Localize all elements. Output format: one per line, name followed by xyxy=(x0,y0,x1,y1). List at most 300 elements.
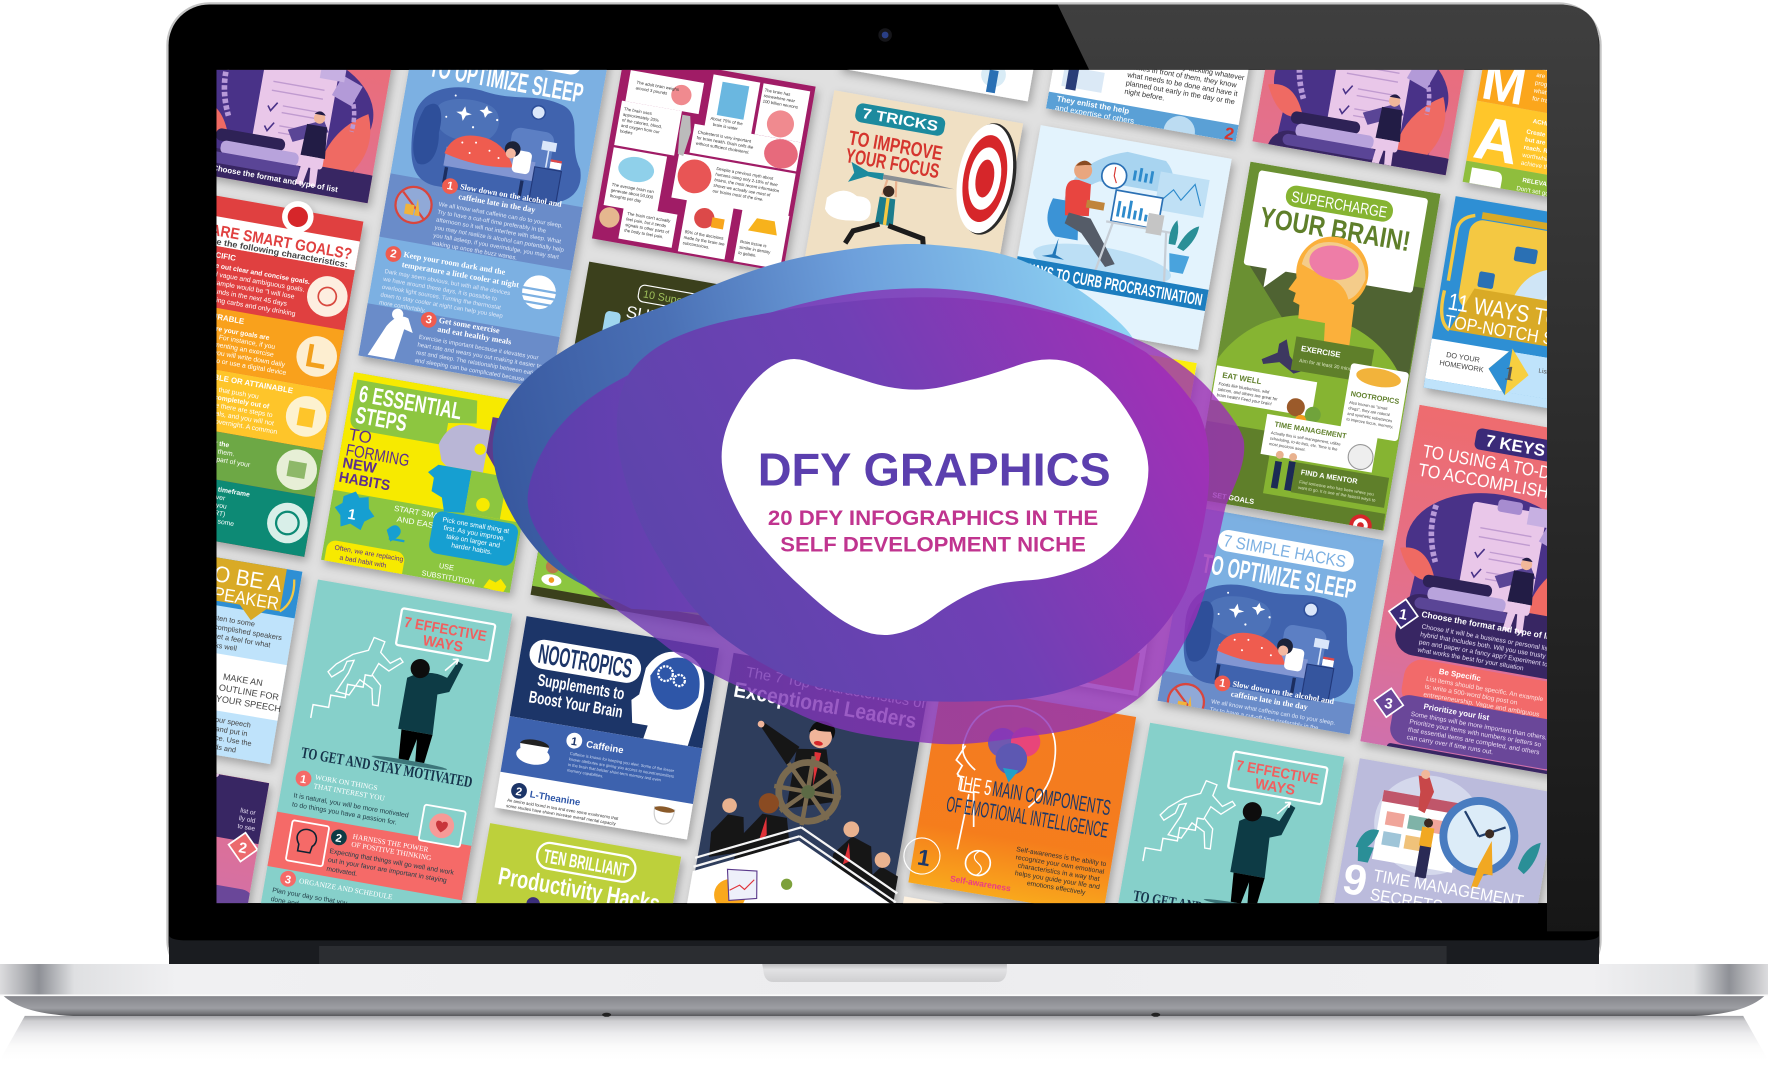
poster: improve your focus: 1 xyxy=(814,261,824,276)
badge: blue back layer xyxy=(493,244,1173,631)
poster: speaker left: SPEAKER xyxy=(201,581,280,614)
poster: list format lower-left: to see xyxy=(237,823,256,833)
exercise box xyxy=(1291,336,1374,383)
poster: ten brilliant productivity hacks: Productivity Hacks xyxy=(496,863,662,918)
poster: optimize sleep top: Dark may seem obvious, but with all the devices xyxy=(384,269,511,297)
poster: list format lower-left: list or xyxy=(240,807,257,817)
poster: supercharge your brain: YOUR BRAIN! xyxy=(1257,200,1413,257)
poster: smart goals: An example would be "I will lose xyxy=(199,277,295,301)
poster: list format lower-left xyxy=(216,773,275,904)
poster: eleven ways speaker: TOP-NOTCH SPEAKER xyxy=(1443,311,1619,360)
poster: hidden under badge xyxy=(1076,354,1202,704)
poster: six essential steps: SUBSTITUTION xyxy=(421,568,475,586)
poster: superfoods: 10 Superfoods xyxy=(642,288,713,312)
poster: seven keys to do list: Some things will be more important than others. xyxy=(1410,711,1547,742)
poster: improve your focus xyxy=(804,90,1029,256)
poster: MAD acronym: Don't set goals xyxy=(1516,185,1557,199)
poster: optimize sleep top: temperature a little cooler at night xyxy=(401,260,520,290)
subtitle xyxy=(768,505,1098,557)
poster: optimize sleep top: 2 xyxy=(389,248,397,261)
poster: MAD acronym: A xyxy=(1469,103,1524,177)
poster: optimize sleep right: caffeine late in the day xyxy=(1230,689,1308,712)
poster: brain facts: approximately 20% xyxy=(623,112,659,123)
poster: superfoods: YOUR BRAIN xyxy=(630,323,737,360)
poster: optimize sleep top: We all know what caffeine can do to your sleep. xyxy=(438,202,564,230)
poster: seven keys to do list: Prioritize your items with numbers or letters so xyxy=(1409,719,1542,749)
poster: supercharge your brain: to improve focus, memory, xyxy=(1346,416,1394,429)
poster: MAD acronym: M xyxy=(1478,51,1530,116)
poster: brain facts: signals to other parts of xyxy=(625,222,670,235)
poster: improve your focus: 7 TRICKS xyxy=(861,106,939,135)
poster: brain facts: without sufficient cholesterol. xyxy=(695,141,750,155)
screen glare on bezel xyxy=(1058,5,1599,940)
poster: list format top-left: Choose the format and type of list xyxy=(212,163,339,194)
poster: seven keys to do list: hybrid that includes both. Will you use trusty old xyxy=(1420,631,1557,662)
poster: brain facts: Cholesterol is very important xyxy=(697,129,752,144)
poster: MAD acronym: Create go xyxy=(1526,128,1555,140)
poster: brain facts: of the calories, blood, xyxy=(622,117,662,129)
poster: smart goals: Make sure it is part of your xyxy=(171,448,251,469)
poster: eleven ways speaker xyxy=(1422,196,1547,417)
poster: six essential steps: take on larger and xyxy=(446,533,501,550)
laptop lid xyxy=(166,2,1602,983)
poster: optimize sleep right: Try to have a cut-off time preferably in the xyxy=(1209,707,1319,732)
poster: speaker left: friends and xyxy=(200,740,237,755)
poster: speaker left: accomplished speakers xyxy=(206,621,283,642)
poster: smart goals xyxy=(216,195,369,565)
poster: optimize sleep top: 7 SIMPLE HACKS xyxy=(456,36,569,70)
poster: smart goals: ARE SMART GOALS? xyxy=(209,222,353,263)
poster: exceptional leaders: Exceptional Leaders xyxy=(732,677,918,733)
poster: optimize sleep top: and eat healthy meals xyxy=(437,325,512,347)
poster: optimize sleep top: and sleeping can be complicated because xyxy=(414,358,525,383)
poster: eleven ways speaker: Listen to some xyxy=(1538,367,1579,381)
poster: smart goals: have the following characteristics: xyxy=(200,234,349,269)
poster: optimize sleep right: TO OPTIMIZE SLEEP xyxy=(1200,548,1358,605)
poster: smart goals: Write out clear and concise goals. xyxy=(202,260,311,286)
poster: effective ways left: 7 EFFECTIVE xyxy=(403,615,488,645)
poster: supercharge your brain: Actually this is self-management, utilize xyxy=(1271,430,1342,447)
poster: blindly tackling: Instead of blindly tackling whatever xyxy=(1132,54,1246,82)
brain fact cards xyxy=(598,60,811,269)
poster: brain facts: made by the brain are xyxy=(683,235,726,247)
poster: smart goals: have a time to add some xyxy=(160,508,235,528)
poster: optimize sleep top: overlook light sources. Turning the thermostat xyxy=(381,285,502,312)
badge: white blob xyxy=(722,359,1148,635)
poster: time management secrets: 9 xyxy=(1339,855,1371,906)
webcam xyxy=(878,28,892,42)
poster: brain facts: to gelatin. xyxy=(738,250,757,258)
poster: MAD acronym: for track. xyxy=(1532,95,1557,106)
poster: nootropics: known attributes are giving you access to neurotransmitters xyxy=(569,756,675,779)
poster: six essential steps: Often, we are replacing xyxy=(334,545,404,564)
poster: emotional intelligence: emotions effectively xyxy=(1026,880,1086,897)
poster: curb procrastination xyxy=(1006,125,1232,353)
poster: seven keys to do list xyxy=(1359,404,1547,783)
poster: effective ways left: 3 xyxy=(284,874,292,887)
poster: effective ways left: HARNESS THE POWER xyxy=(352,832,429,854)
poster: supercharge your brain: FIND A MENTOR xyxy=(1300,467,1359,486)
poster: brain facts: around 3 pounds xyxy=(635,85,668,96)
poster: MAD acronym: are impl. xyxy=(1536,72,1561,83)
poster: eleven ways speaker: 11 WAYS TO BE A xyxy=(1446,289,1612,342)
reflection xyxy=(0,1016,1768,1060)
poster: brain facts: The brain uses xyxy=(624,106,652,116)
poster: optimize sleep top: Exercise is important because it elevates your xyxy=(418,335,539,362)
poster: six essential steps: harder habits. xyxy=(451,542,493,556)
poster: MAD acronym xyxy=(1462,70,1547,206)
poster: emotional intelligence: helps you guide your life and xyxy=(1014,870,1100,891)
poster: smart goals: reach. Realize there are steps to xyxy=(176,395,273,419)
poster: blindly tackling: and expertise of others xyxy=(1054,103,1135,126)
poster: seven keys to do list: TO USING A TO-DO LIST xyxy=(1421,441,1600,492)
poster: smart goals: 10 pounds in the next 45 days xyxy=(198,285,288,308)
poster: smart goals: sake of having them. xyxy=(172,441,235,458)
poster: nootropics: some studies have shown increase overall mental capacity xyxy=(506,803,617,826)
poster: optimize sleep top: down to stay cooler at night can help you sleep xyxy=(380,292,504,320)
poster: emotional intelligence: OF EMOTIONAL INTELLIGENCE xyxy=(945,792,1110,843)
poster: nootropics: memory capabilities. xyxy=(567,767,604,779)
poster: time management secrets: TIME MANAGEMENT xyxy=(1372,866,1525,911)
poster: seven keys to do list: Be Specific xyxy=(1438,667,1482,683)
poster: ten brilliant productivity hacks: TEN BRILLIANT xyxy=(542,846,630,882)
poster: six essential steps: TO xyxy=(347,425,373,448)
poster: speaker left: YOUR SPEECH xyxy=(215,693,282,714)
poster: emotional intelligence: Self-awareness is the ability to xyxy=(1016,846,1107,868)
poster: MAD acronym: RELEVANT xyxy=(1522,177,1556,190)
poster: brain facts: brains, the most recent information xyxy=(714,177,780,193)
find a mentor box xyxy=(1291,462,1389,508)
poster: supercharge your brain: most precious asset. xyxy=(1269,441,1306,452)
poster: nootropics: 1 xyxy=(570,736,578,749)
set goals box xyxy=(1205,484,1385,530)
poster: emotional intelligence: 1 xyxy=(916,845,932,871)
poster: supercharge your brain: salmon, and others are great for xyxy=(1217,387,1279,402)
poster: seven keys to do list: Prioritize your list xyxy=(1423,702,1490,722)
time management card xyxy=(1261,414,1378,473)
poster: speaker left: Listen to some xyxy=(207,612,256,629)
poster: optimize sleep top: you fall asleep, if you overindulge, you may start xyxy=(433,233,560,261)
poster: curb procrastination: WAYS TO CURB PROCRASTINATION xyxy=(1023,260,1204,310)
eat well card xyxy=(1211,365,1317,417)
head with brain xyxy=(1288,236,1368,346)
poster: supercharge your brain: SUPERCHARGE xyxy=(1290,189,1388,222)
poster: nootropics: Caffeine xyxy=(585,739,624,756)
poster: smart goals: chance you will ever xyxy=(165,485,226,503)
poster: blindly tackling xyxy=(1044,70,1256,150)
poster: brain facts: similar in density xyxy=(739,244,772,255)
poster: improve your focus: TO IMPROVE xyxy=(847,127,944,165)
poster: effective ways left: TO GET AND STAY MOTIVATED xyxy=(300,745,474,791)
step 3 diamond: 3 xyxy=(1383,696,1394,713)
poster: brain facts: About 75% of the xyxy=(710,116,744,126)
poster: optimize sleep top: rest and sleep. The relationship between eating xyxy=(415,350,540,378)
poster: effective ways left: 1 xyxy=(299,774,307,786)
poster: smart goals: MEASURABLE xyxy=(189,308,245,326)
poster: supercharge your brain: EXERCISE xyxy=(1300,344,1341,359)
poster: ten brilliant productivity hacks xyxy=(474,823,687,904)
poster: effective ways left: OF POSITIVE THINKING xyxy=(351,840,433,863)
poster: six essential steps: a bad habit with xyxy=(339,555,387,570)
ship deck xyxy=(687,840,890,904)
poster: optimize sleep right: Slow down on the alcohol and xyxy=(1232,679,1335,706)
poster: seven keys to do list: TO ACCOMPLISH MORE xyxy=(1417,460,1602,511)
poster: smart goals: program, you will write down daily xyxy=(185,344,286,369)
poster: smart goals: Create goals that push you xyxy=(179,380,259,401)
poster: exceptional leaders xyxy=(686,653,928,904)
poster: effective ways right: WAYS xyxy=(1254,776,1296,799)
poster: brain facts: feel pain, but it sends xyxy=(626,216,666,228)
poster: nootropics: Supplements to xyxy=(536,670,626,704)
poster: nootropics: Boost Your Brain xyxy=(528,687,624,722)
poster: brain facts: and oxygen from our xyxy=(621,123,661,135)
poster: MAD acronym: achieve the xyxy=(1520,160,1553,172)
poster: supercharge your brain: EAT WELL xyxy=(1222,371,1262,386)
poster: nootropics: An amino acid found in tea and even some mushrooms that xyxy=(507,797,620,821)
poster: MAD acronym: ACHIEV. xyxy=(1532,118,1558,129)
base top surface xyxy=(0,964,1768,996)
poster: MAD acronym: but are no xyxy=(1524,136,1555,148)
poster: speaker left: works well xyxy=(202,638,238,653)
poster: seven keys to do list: that essential items are completed, and others xyxy=(1407,726,1541,757)
poster: effective ways left: WAYS xyxy=(421,633,464,656)
laptop base xyxy=(0,964,1768,1060)
poster: six essential steps: START SMALL xyxy=(393,504,449,522)
poster: supercharge your brain: TIME MANAGEMENT xyxy=(1274,420,1348,441)
poster: six essential steps: HABITS xyxy=(337,470,392,494)
poster: brain facts: the body to feel pain. xyxy=(624,228,664,239)
poster: MAD acronym: reach. Re xyxy=(1523,144,1552,156)
title: DFY GRAPHICS xyxy=(758,444,1111,496)
poster: brain facts: somewhere near xyxy=(763,93,796,104)
poster: smart goals: ACHIEVABLE OR ATTAINABLE xyxy=(178,366,294,395)
lid opening notch xyxy=(762,964,1007,982)
poster: MAD acronym: what you xyxy=(1532,87,1559,99)
poster: effective ways right: 7 EFFECTIVE xyxy=(1235,758,1320,788)
poster: optimize sleep top xyxy=(357,70,614,392)
poster: superfoods xyxy=(529,262,717,629)
poster: blindly tackling: 2 xyxy=(1223,124,1236,144)
subtitle: SELF DEVELOPMENT NICHE xyxy=(780,532,1086,557)
poster: supercharge your brain xyxy=(1205,162,1446,538)
poster: effective ways left: to do things you have a passion for. xyxy=(291,801,397,827)
central badge xyxy=(493,244,1244,744)
poster: optimize sleep top: heart rate and wears you out making it easier to xyxy=(417,342,543,370)
poster: emotional intelligence xyxy=(903,698,1142,904)
poster: brain facts: Brain tissue is xyxy=(740,239,767,248)
badge: main purple layer xyxy=(617,297,1209,702)
poster: blindly tackling: planned out early in the day or the xyxy=(1125,78,1236,106)
poster: speaker left: TO BE A xyxy=(200,559,284,597)
poster: speaker left: MAKE AN xyxy=(222,672,263,688)
poster: optimize sleep top: more comfortably. xyxy=(379,300,426,314)
poster: optimize sleep top: Try to have a cut-off time preferably in the xyxy=(437,210,547,235)
poster: improve your focus: PREPARE YOUR WORK xyxy=(832,265,922,289)
poster: effective ways left: out in your favor are important in staying xyxy=(327,857,447,885)
poster: supercharge your brain: Also known as "smart xyxy=(1349,400,1389,411)
poster: eleven ways speaker: DO YOUR xyxy=(1446,350,1481,364)
target xyxy=(956,123,1020,235)
sleep box xyxy=(1191,420,1273,501)
poster: list format top-left xyxy=(216,70,399,212)
poster: optimize sleep top: Keep your room dark and the xyxy=(403,250,506,277)
puzzle head xyxy=(428,417,504,519)
poster: optimize sleep right xyxy=(1156,509,1390,742)
poster: effective ways left: motivated. xyxy=(326,866,358,878)
poster: nootropics: L-Theanine xyxy=(529,789,581,809)
poster: brain facts: 100 billion neurons xyxy=(762,99,798,110)
base body xyxy=(0,964,1768,1016)
poster: effective ways right xyxy=(1089,723,1344,1070)
poster: effective ways left xyxy=(259,580,518,904)
poster: emotional intelligence: recognize your own emotional xyxy=(1015,854,1105,876)
poster: white top strip xyxy=(838,70,1041,110)
poster: smart goals: by cutting carbs and only drinking xyxy=(196,294,296,318)
poster: six essential steps: NEW xyxy=(341,455,378,477)
subtitle: 20 DFY INFOGRAPHICS IN THE xyxy=(768,505,1098,530)
poster: effective ways left: It is natural, you will be more motivated xyxy=(293,792,409,820)
poster: smart goals: add the S in SMART) xyxy=(162,501,226,519)
poster: seven keys to do list: List items should be specific. An example xyxy=(1426,676,1544,703)
poster: optimize sleep top: Slow down on the alcohol and xyxy=(459,182,563,209)
dart with hanging man xyxy=(843,162,954,245)
poster: seven keys to do list: entrepreneurship. Vague and ambiguous xyxy=(1423,691,1541,719)
poster: emotional intelligence: THE 5 xyxy=(954,771,994,800)
poster: exceptional leaders: The 7 Top Characteristics of xyxy=(745,665,928,712)
poster: nootropics xyxy=(495,616,719,840)
poster: speaker left: to get a feel for what xyxy=(204,630,271,649)
poster: smart goals: worthwhile goals, and you will not xyxy=(173,403,274,428)
poster: speaker left: OUTLINE FOR xyxy=(218,682,280,702)
poster: effective ways left: ORGANIZE AND SCHEDULE xyxy=(298,876,394,901)
screen with infographic collage xyxy=(216,70,1547,904)
poster: seven keys to do list: can carry over if time runs out. xyxy=(1406,734,1494,756)
poster: six essential steps: STEPS xyxy=(353,403,409,437)
poster: brain facts: brain is water xyxy=(712,122,739,131)
poster: seven keys to do list: is: write a 500-word blog post on xyxy=(1424,684,1518,707)
poster: supercharge your brain: brain health! Feed your brain! xyxy=(1216,392,1272,406)
poster: effective ways left: Plan your day so that you xyxy=(272,887,348,907)
poster: emotional intelligence: Self-awareness xyxy=(949,873,1012,893)
step 1 diamond xyxy=(1388,598,1419,630)
deck chart icon xyxy=(714,868,758,904)
poster: speaker left: your speech xyxy=(211,714,252,730)
poster: six essential steps xyxy=(319,372,543,605)
rubber feet xyxy=(602,1013,1160,1017)
poster: seven keys to do list: what works the best for your situation xyxy=(1416,647,1524,672)
poster: smart goals: SPECIFIC xyxy=(199,248,237,263)
poster: cream poster below emotional intelligence xyxy=(902,896,944,904)
poster: smart goals: what you do or use a digital device xyxy=(182,352,287,377)
badge: translucent purple layer xyxy=(528,288,1244,744)
poster: MAD acronym: worthwhile xyxy=(1521,152,1552,164)
poster: blindly tackling: They enlist the help xyxy=(1056,94,1130,116)
poster: effective ways left: Expecting that things will go well and work xyxy=(329,848,455,877)
poster: optimize sleep right: We all know what caffeine can do to your sleep. xyxy=(1211,699,1336,727)
poster: brain facts: The brain has xyxy=(764,87,791,97)
poster: seven keys to do list: Choose the format and type of list xyxy=(1421,609,1557,643)
poster: blindly tackling: what needs to be done and have it xyxy=(1126,70,1238,98)
poster: list format top-left: Choose if it will be a business or personal list or xyxy=(212,177,349,208)
poster: smart goals: Goals without a timeframe xyxy=(166,477,251,499)
poster: MAD acronym: program, xyxy=(1534,80,1560,91)
poster: supercharge your brain: NOOTROPICS xyxy=(1350,389,1400,406)
poster: speaker left xyxy=(216,556,308,772)
poster: blindly tackling: night before. xyxy=(1124,87,1165,103)
poster: optimize sleep top: caffeine late in the day xyxy=(458,192,536,215)
poster: list format lower-left: 2 xyxy=(237,840,248,857)
poster: smart goals: but are not completely out of xyxy=(177,388,270,411)
poster: optimize sleep top: we have around these days, it is possible to xyxy=(382,277,498,303)
poster: optimize sleep top: 1 xyxy=(446,180,454,193)
poster: optimize sleep top: Get some exercise xyxy=(438,316,501,335)
poster: effective ways left: done and xyxy=(270,896,299,908)
poster: brain facts: our brains most of the time. xyxy=(712,188,764,202)
poster: brain facts: Despite a previous myth about xyxy=(716,166,774,181)
poster: brain facts: thoughts per day xyxy=(609,193,642,204)
poster: six essential steps: FORMING xyxy=(344,440,411,470)
poster: eleven ways speaker: HOMEWORK xyxy=(1439,358,1484,374)
poster: effective ways left: 2 xyxy=(335,832,343,845)
poster: brain facts: generate about 50,000 xyxy=(610,187,654,200)
poster: optimize sleep top: you may not realize is alcohol can potentially help xyxy=(434,225,565,254)
poster: supercharge your brain: SET GOALS xyxy=(1212,490,1255,506)
poster: optimize sleep right: 1 xyxy=(1218,677,1226,690)
poster: improve your focus: YOUR FOCUS xyxy=(844,145,941,183)
poster: six essential steps: 1 xyxy=(346,507,357,524)
poster: nootropics: 2 xyxy=(515,786,523,799)
poster: supercharge your brain: and synthetic substances xyxy=(1347,411,1393,423)
poster: smart goals: are implementing an exercise xyxy=(186,337,274,359)
poster: brain facts: subconscious. xyxy=(682,240,710,250)
poster: seven keys to do list: Choose if it will be a business or personal list or xyxy=(1421,623,1558,654)
poster: effective ways left: WORK ON THINGS xyxy=(314,772,378,792)
poster: emotional intelligence: characteristics in a way that xyxy=(1017,863,1100,883)
poster: effective ways left: THAT INTEREST YOU xyxy=(313,781,386,803)
poster: brain facts: shows we actually use most of xyxy=(713,183,772,198)
poster: brain facts: for brain health. Brain cells die xyxy=(696,135,754,150)
poster: list format lower-left: lly old xyxy=(238,815,256,825)
poster: improve your focus: Create a list of what xyxy=(830,277,895,297)
poster: nootropics: NOOTROPICS xyxy=(536,639,634,684)
poster: six essential steps: 6 ESSENTIAL xyxy=(357,382,464,425)
poster: speaker left: lines and put in xyxy=(198,721,248,738)
poster: supercharge your brain: drugs", they are natural xyxy=(1348,405,1390,417)
poster: six essential steps: USE xyxy=(438,561,455,572)
poster: speaker left: practice. Use the xyxy=(197,730,252,748)
poster: optimize sleep right: 7 SIMPLE HACKS xyxy=(1222,531,1347,571)
poster: list format top centre xyxy=(1251,70,1472,184)
poster: smart goals: Goals just for the xyxy=(174,433,230,449)
ship crew xyxy=(709,814,902,904)
poster: brain facts: The adult brain weighs xyxy=(636,80,679,92)
poster: blindly tackling: comes in front of them, they know xyxy=(1128,62,1238,90)
poster: eleven ways speaker: 1 xyxy=(1503,362,1516,386)
poster: brain facts: humans using only 2-10% of their xyxy=(715,172,779,188)
poster: superfoods: SUPERFOODS xyxy=(625,302,744,342)
poster: smart goals: finish. Make sure you xyxy=(163,493,227,511)
poster: seven keys to do list: 7 KEYS xyxy=(1484,431,1547,460)
poster: supercharge your brain: Aim for at least 30 minutes xyxy=(1299,358,1359,374)
poster: supercharge your brain: scheduling, to-do lists, etc. Time is the xyxy=(1270,435,1339,452)
step 3 diamond xyxy=(1373,687,1404,718)
poster: brain facts: The brain can't actually xyxy=(627,211,672,224)
captain at ship wheel xyxy=(758,720,842,826)
poster: smart goals: Make sure your goals are xyxy=(189,321,270,342)
poster: brain facts xyxy=(592,53,816,272)
poster: six essential steps: first. As you improve, xyxy=(443,525,506,543)
poster: optimize sleep top: 3 xyxy=(425,314,433,327)
